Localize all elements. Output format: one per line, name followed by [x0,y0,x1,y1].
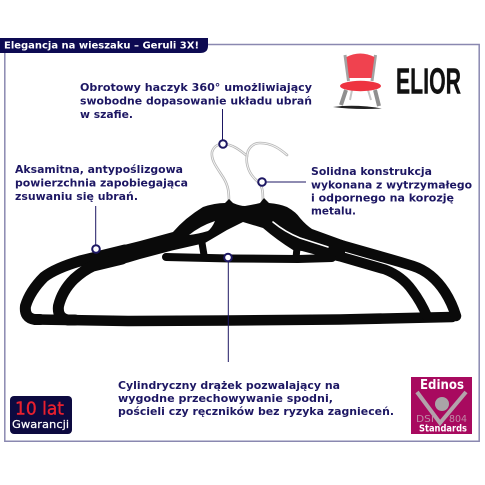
callout: construction: Solidna konstrukcja [311,165,432,178]
icon: chair [333,54,382,109]
badge: Edinos standards: DSI [416,414,434,425]
hanger: inner right arm [320,252,427,316]
callout: construction: wykonana z wytrzymałego [311,178,472,192]
hook: left [212,144,247,202]
callout: velvet surface: Aksamitna, antypoślizgowa [15,163,183,176]
hook: right [247,143,287,202]
callout: construction [258,165,472,218]
callout: construction: i odpornego na korozję [311,192,454,204]
callout: bar: wygodne przechowywanie spodni, [118,392,333,405]
callout: hook: Obrotowy haczyk 360° umożliwiający [80,81,312,94]
callout: hook [80,81,312,148]
callout: hook: swobodne dopasowanie układu ubrań [80,94,312,108]
hanger: trouser bar [166,257,332,259]
callout: bar: Cylindryczny drążek pozwalający na [118,379,340,392]
title banner [0,38,208,53]
badge: 10 year warranty: 10 lat [15,398,64,420]
badge: Edinos standards: Edinos [420,378,464,393]
hanger: struts [202,243,297,258]
badge: 10 year warranty [10,396,72,434]
badge: Edinos standards [411,377,472,434]
hanger: left gap [189,221,215,235]
callout: velvet surface: powierzchnia zapobiegająca [15,176,188,190]
callout: construction: metalu. [311,204,356,218]
callout: hook: w szafie. [80,108,133,121]
badge: Edinos standards: Standards [419,424,467,434]
callout: bar: pościeli czy ręczników bez ryzyka zagnieceń. [118,405,394,418]
callout: velvet surface: zsuwaniu się ubrań. [15,190,138,203]
logo: Elior chair [333,54,461,109]
callout: bar [118,254,394,418]
hanger: inner left arm [58,259,122,320]
hanger: outer left arm [25,250,125,320]
title banner: Elegancja na wieszaku – Geruli 3X! [4,40,199,52]
badge: Edinos standards: 804 [449,414,467,425]
hanger: right gap [273,222,328,247]
badge: 10 year warranty: Gwarancji [12,418,69,431]
hanger: outer right arm [330,242,456,316]
hangers [25,143,456,321]
callout: velvet surface [15,163,188,253]
hanger: bottom bar [36,317,452,321]
hanger: central body [118,198,345,266]
